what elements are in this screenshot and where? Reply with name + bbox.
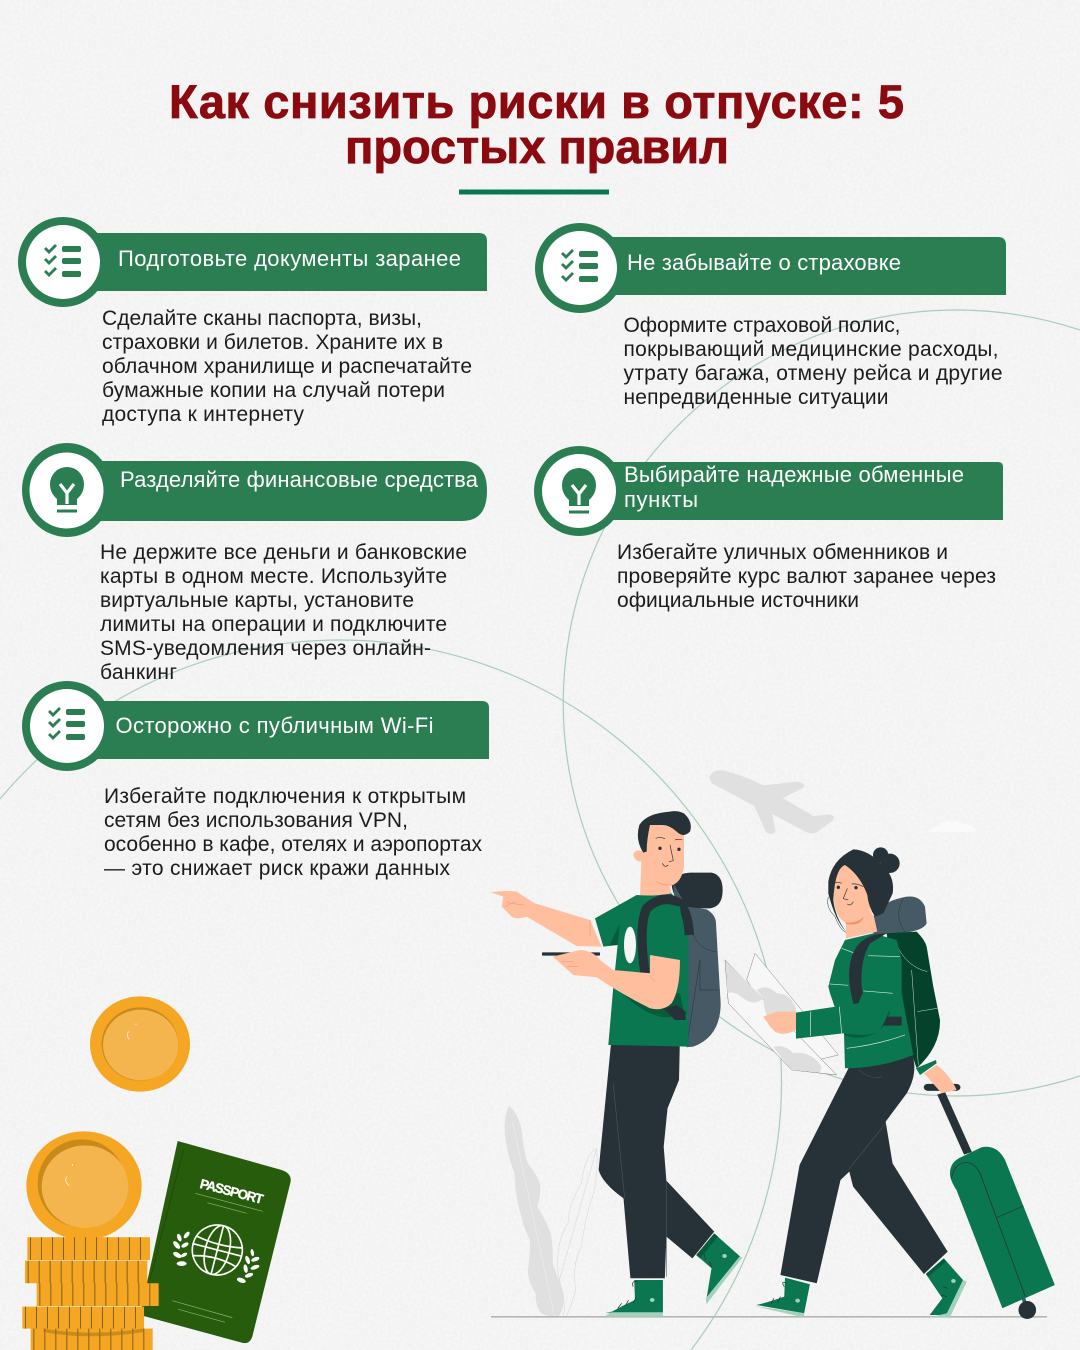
- text: documents: облачном хранилище и распечатайте: [102, 355, 472, 378]
- text: finances: SMS-уведомления через онлайн-: [100, 637, 431, 660]
- text: wi-fi: — это снижает риск кражи данных: [104, 857, 450, 880]
- decorative arcs: [0, 310, 1080, 1350]
- illustration: coins: [22, 996, 190, 1350]
- text: finances: карты в одном месте. Используйте: [100, 565, 447, 588]
- text: insurance: покрывающий медицинские расходы,: [624, 338, 998, 361]
- plant: [505, 1106, 597, 1317]
- text: insurance: утрату багажа, отмену рейса и другие: [624, 362, 1002, 385]
- text: documents: доступа к интернету: [102, 403, 304, 426]
- panel: finances: [22, 443, 487, 684]
- icon: checklist: [562, 250, 598, 282]
- icon: airplane: [709, 770, 834, 834]
- panel: documents: [18, 217, 487, 426]
- suitcase: [928, 1087, 1055, 1319]
- illustration: woman traveller with suitcase: [725, 847, 1055, 1319]
- man legs and boots: [599, 1045, 743, 1317]
- text: documents: страховки и билетов. Храните их в: [102, 331, 443, 354]
- title: простых правил: [345, 120, 729, 173]
- text: finances: виртуальные карты, установите: [100, 589, 414, 612]
- icon: checklist: [45, 245, 81, 277]
- text: exchange: Избегайте уличных обменников и: [617, 541, 948, 564]
- woman upper body and map: [725, 847, 957, 1093]
- title: [169, 75, 904, 194]
- man upper body: [491, 811, 723, 1047]
- illustration: passport: [140, 1141, 291, 1343]
- cloud: [930, 820, 977, 832]
- text: finances: Не держите все деньги и банковские: [100, 541, 467, 564]
- text: insurance: Оформите страховой полис,: [624, 314, 900, 337]
- illustration: man traveller: [491, 811, 743, 1317]
- woman legs and boots: [754, 1055, 967, 1317]
- text: exchange: [617, 541, 996, 612]
- passport label: PASSPORT: [198, 1176, 265, 1207]
- heading: wi-fi: Осторожно с публичным Wi-Fi: [116, 713, 434, 738]
- icon: light bulb: [50, 467, 84, 512]
- ground line: [491, 1316, 1047, 1318]
- icon: checklist: [49, 708, 85, 740]
- map: [725, 953, 838, 1075]
- text: finances: лимиты на операции и подключите: [100, 613, 447, 636]
- text: documents: [102, 307, 472, 426]
- icon: laurels: [172, 1231, 260, 1284]
- text: wi-fi: Избегайте подключения к открытым: [104, 785, 466, 808]
- coin stack: [22, 1237, 159, 1350]
- text: exchange: официальные источники: [617, 589, 859, 612]
- top single coin: [90, 996, 190, 1092]
- text: wi-fi: сетям без использования VPN,: [104, 809, 408, 832]
- heading: exchange: пункты: [624, 487, 698, 512]
- text: finances: [100, 541, 467, 684]
- panel: exchange: [534, 446, 1003, 612]
- heading: documents: Подготовьте документы заранее: [118, 246, 461, 271]
- panel: insurance: [535, 223, 1006, 409]
- text: exchange: проверяйте курс валют заранее через: [617, 565, 996, 588]
- title: Как снизить риски в отпуске: 5: [169, 75, 904, 128]
- text: insurance: непредвиденные ситуации: [624, 386, 888, 409]
- text: wi-fi: особенно в кафе, отелях и аэропортах: [104, 833, 482, 856]
- heading: exchange: Выбирайте надежные обменные: [624, 462, 964, 487]
- text: documents: бумажные копии на случай потери: [102, 379, 445, 402]
- heading: insurance: Не забывайте о страховке: [627, 250, 901, 275]
- text: finances: банкинг: [100, 661, 177, 684]
- heading: finances: Разделяйте финансовые средства: [120, 467, 479, 492]
- icon: globe: [187, 1220, 248, 1280]
- text: insurance: [624, 314, 1002, 409]
- coin on stack: [26, 1131, 142, 1240]
- icon: light bulb: [562, 468, 596, 514]
- text: documents: Сделайте сканы паспорта, визы,: [102, 307, 422, 330]
- text: wi-fi: [104, 785, 482, 880]
- panel: wi-fi: [22, 681, 489, 880]
- heading: exchange: [624, 462, 964, 512]
